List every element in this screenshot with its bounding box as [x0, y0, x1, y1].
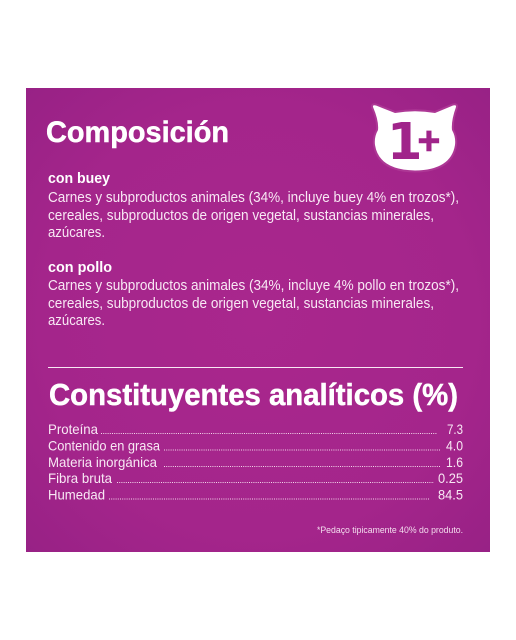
text block: con buey: cereales, subproductos de origen vegetal, sustancias minerales, — [48, 208, 434, 224]
icon: cat head 1+: 1 — [387, 113, 422, 172]
text block: con pollo — [48, 259, 459, 329]
text block: con pollo: Carnes y subproductos animales (34%, incluye 4% pollo en trozos*), — [48, 278, 459, 294]
row: Materia inorgánica: 1.6 — [446, 454, 463, 470]
text block: con buey: azúcares. — [48, 225, 105, 241]
text block: con buey — [48, 170, 459, 241]
text block: con buey: con buey — [48, 170, 111, 187]
text block: con buey: Carnes y subproductos animales (34%, incluye buey 4% en trozos*), — [48, 190, 459, 206]
row: Fibra bruta: Fibra bruta — [48, 470, 112, 486]
heading: Constituyentes analíticos: Constituyentes analíticos (%) — [49, 377, 458, 412]
text block: con pollo: cereales, subproductos de origen vegetal, sustancias minerales, — [48, 296, 434, 312]
icon: cat head 1+ — [373, 105, 456, 172]
row: Humedad: 84.5 — [438, 486, 463, 502]
row: Contenido en grasa: Contenido en grasa — [48, 438, 160, 454]
row: Proteína — [48, 421, 463, 437]
text block: con pollo: con pollo — [48, 259, 112, 276]
row: Humedad: Humedad — [48, 486, 105, 502]
row: Materia inorgánica — [48, 454, 463, 470]
footnote: *Pedaço tipicamente 40% do produto. — [317, 525, 463, 535]
table: analytical constituents — [48, 421, 463, 502]
row: Materia inorgánica: Materia inorgánica — [48, 454, 157, 470]
heading: Composición: Composición — [46, 116, 229, 149]
row: Contenido en grasa — [48, 438, 463, 454]
row: Fibra bruta: 0.25 — [438, 470, 463, 486]
row: Contenido en grasa: 4.0 — [446, 438, 463, 454]
row: Proteína: 7.3 — [447, 421, 463, 437]
row: Proteína: Proteína — [48, 421, 98, 437]
row: Humedad — [48, 486, 463, 502]
text block: con pollo: azúcares. — [48, 313, 105, 329]
icon: cat head 1+: + — [416, 124, 442, 158]
row: Fibra bruta — [48, 470, 463, 486]
panel: purple background — [26, 88, 490, 552]
